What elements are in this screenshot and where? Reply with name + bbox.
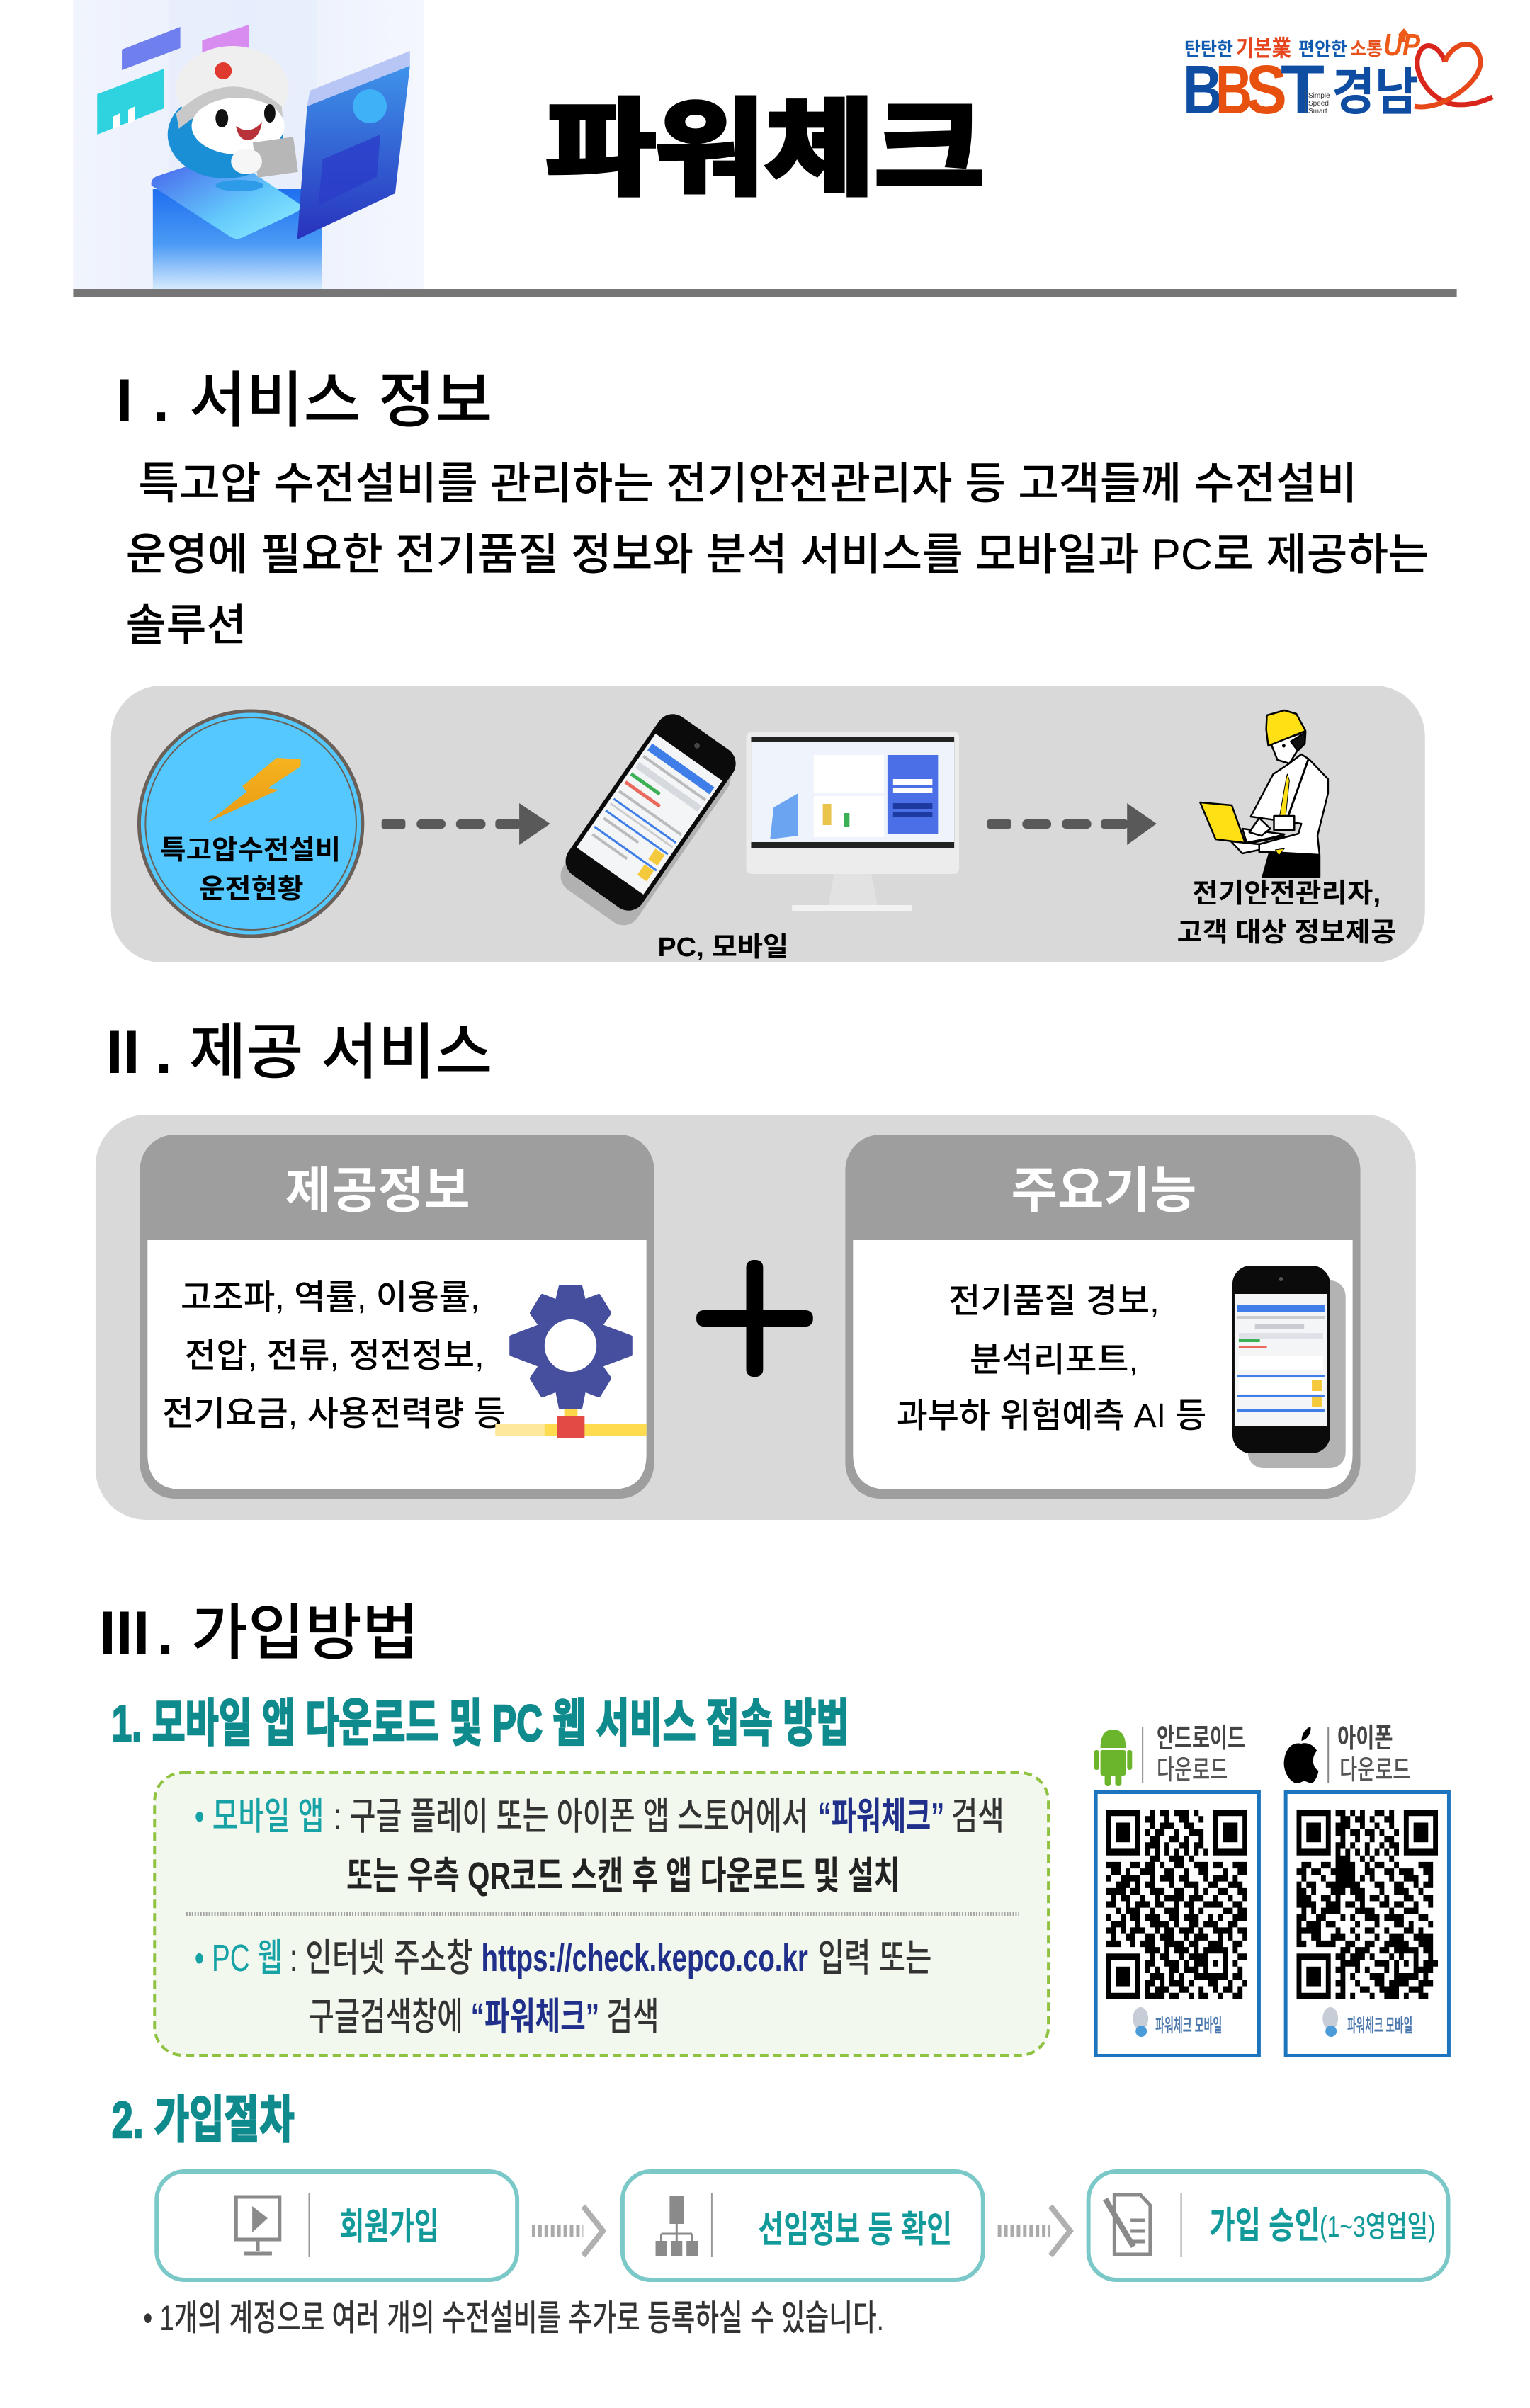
card: key functions	[845, 1135, 1361, 1499]
text block: service description: 솔루션	[126, 601, 246, 650]
text: PC web: : 인터넷 주소창	[290, 1937, 473, 1980]
QR code: iPhone	[1296, 1810, 1438, 1999]
icon: safety manager with laptop	[1200, 710, 1328, 877]
card: key functions: 주요기능	[1011, 1163, 1196, 1218]
logo: BBST 경남: 편안한	[1298, 38, 1347, 59]
text: PC web: 구글검색창에	[308, 1996, 463, 2038]
logo: BBST 경남: 기본業	[1236, 35, 1291, 61]
text: PC web: “파워체크”	[471, 1996, 599, 2038]
icon: high-voltage equipment circle with bolt	[139, 711, 363, 936]
logo: BBST 경남: T	[1281, 51, 1325, 128]
label: manager and customer info	[1177, 879, 1396, 948]
card: key functions: 과부하 위험예측 AI 등	[897, 1397, 1206, 1435]
panel: Android QR download	[1094, 1724, 1259, 2055]
text: mobile app	[195, 1795, 1004, 1897]
logo: BBST 경남: B	[1183, 51, 1223, 128]
card: provided information: 제공정보	[285, 1163, 470, 1218]
logo: BBST 경남: UP	[1383, 28, 1421, 62]
text: mobile app: 또는 우측 QR코드 스캔 후 앱 다운로드 및 설치	[346, 1855, 900, 1897]
page body	[96, 367, 1449, 2338]
arrow: step 2 to step 3	[998, 2206, 1070, 2256]
text: PC web: 검색	[606, 1996, 659, 2038]
text: PC web: https://check.kepco.co.kr	[482, 1937, 808, 1980]
heading: section II: 제공 서비스	[189, 1018, 492, 1086]
heading: section II: .	[155, 1018, 172, 1086]
text: mobile app: : 구글 플레이 또는 아이폰 앱 스토어에서	[334, 1795, 808, 1838]
header divider	[73, 289, 1457, 297]
heading: section I: .	[152, 367, 169, 435]
caption: power check mobile: 파워체크 모바일	[1347, 2016, 1412, 2036]
text: PC web	[195, 1937, 931, 2038]
icon: hierarchy	[656, 2196, 698, 2256]
panel: Android QR download: 안드로이드	[1157, 1724, 1245, 1754]
step: manager information check: 선임정보 등 확인	[758, 2209, 952, 2250]
text: PC web: 입력 또는	[818, 1937, 931, 1980]
subheading: sign-up procedure: 2. 가입절차	[112, 2092, 295, 2149]
step: sign-up approval	[1089, 2171, 1449, 2280]
arrow: devices to manager	[987, 803, 1157, 845]
card: key functions: 분석리포트,	[970, 1341, 1138, 1379]
icon: plus sign	[696, 1260, 813, 1377]
heading: section I: I	[116, 367, 132, 435]
logo: BBST 경남: 경남	[1332, 64, 1418, 121]
label: manager and customer info: 고객 대상 정보제공	[1177, 918, 1396, 948]
note: multiple facilities per account: • 1개의 계정으로 여러 개의 수전설비를 추가로 등록하실 수 있습니다.	[143, 2298, 884, 2338]
icon: Android robot	[1094, 1730, 1132, 1786]
icon: monitor	[236, 2197, 280, 2254]
icon: Apple logo	[1284, 1727, 1318, 1783]
card: provided information: 전압, 전류, 정전정보,	[185, 1337, 484, 1375]
panel: provided services	[96, 1115, 1416, 1520]
card: key functions: 전기품질 경보,	[948, 1283, 1160, 1320]
step: manager information check	[623, 2171, 983, 2280]
heading: section III: .	[157, 1599, 174, 1667]
panel: iPhone QR download: 다운로드	[1339, 1756, 1410, 1785]
logo: BBST 경남: 탄탄한	[1184, 38, 1233, 59]
heading: section I: 서비스 정보	[189, 367, 492, 435]
text: mobile app: “파워체크”	[818, 1795, 944, 1838]
icon: document with pen	[1105, 2195, 1150, 2254]
title: 파워체크	[546, 91, 984, 208]
heading: section III	[99, 1599, 419, 1667]
QR download panels	[1094, 1724, 1449, 2055]
step: sign-up approval: (1~3영업일)	[1320, 2210, 1436, 2243]
card: provided information: 고조파, 역률, 이용률,	[181, 1279, 480, 1317]
QR code: Android	[1106, 1810, 1247, 1999]
logo: BBST 경남: B	[1216, 51, 1252, 128]
arrow: step 1 to step 2	[532, 2206, 603, 2256]
logo: BBST 경남: S	[1246, 51, 1287, 128]
step: member sign-up: 회원가입	[339, 2206, 439, 2247]
subheading: app download and web access: 1. 모바일 앱 다운로드 및 PC 웹 서비스 접속 방법	[112, 1696, 849, 1752]
page header	[73, 0, 1457, 297]
text: mobile app: • 모바일 앱	[195, 1795, 324, 1838]
card: provided information	[140, 1135, 654, 1499]
card: provided information: 전기요금, 사용전력량 등	[162, 1395, 505, 1433]
text block: service description	[126, 460, 1429, 650]
icon: smartphone with app screen	[1232, 1266, 1346, 1468]
logo: BBST 경남: 소통	[1350, 38, 1383, 59]
label: manager and customer info: 전기안전관리자,	[1192, 879, 1381, 909]
logo: BBST 경남: Simple	[1308, 92, 1330, 100]
text: mobile app: 검색	[951, 1795, 1004, 1838]
caption: power check mobile: 파워체크 모바일	[1155, 2016, 1222, 2036]
caption: power check mobile	[1322, 2007, 1412, 2037]
heading: section III: 가입방법	[191, 1599, 419, 1667]
step: member sign-up	[157, 2171, 517, 2280]
icon: high-voltage equipment circle with bolt: 운전현황	[199, 875, 304, 904]
label: PC and mobile: PC, 모바일	[658, 933, 788, 962]
icon: high-voltage equipment circle with bolt: 특고압수전설비	[160, 836, 341, 865]
logo: BBST 경남: Smart	[1308, 108, 1327, 115]
step: sign-up approval: 가입 승인	[1209, 2205, 1320, 2246]
text block: service description: 운영에 필요한 전기품질 정보와 분석 서비스를 모바일과 PC로 제공하는	[126, 530, 1429, 579]
panel: service flow	[111, 686, 1425, 962]
text block: service description: 특고압 수전설비를 관리하는 전기안전관리자 등 고객들께 수전설비	[138, 460, 1358, 509]
logo: BBST 경남	[1183, 28, 1492, 128]
arrow: circle to devices	[382, 803, 550, 845]
panel: iPhone QR download	[1284, 1724, 1449, 2055]
icon: gear with pipe	[495, 1287, 647, 1438]
text: PC web: • PC 웹	[195, 1937, 283, 1980]
heading: section III: III	[99, 1599, 149, 1667]
icon: smartphone with app screen	[550, 708, 746, 932]
icon: PC monitor with web screen	[747, 732, 959, 911]
panel: access instructions	[154, 1773, 1048, 2055]
heading: section II: II	[106, 1018, 140, 1086]
header illustration: mascot and data panels	[73, 0, 424, 289]
panel: iPhone QR download: 아이폰	[1337, 1724, 1393, 1754]
logo: BBST 경남: Speed	[1308, 100, 1329, 108]
caption: power check mobile	[1133, 2007, 1222, 2037]
panel: Android QR download: 다운로드	[1157, 1756, 1228, 1785]
